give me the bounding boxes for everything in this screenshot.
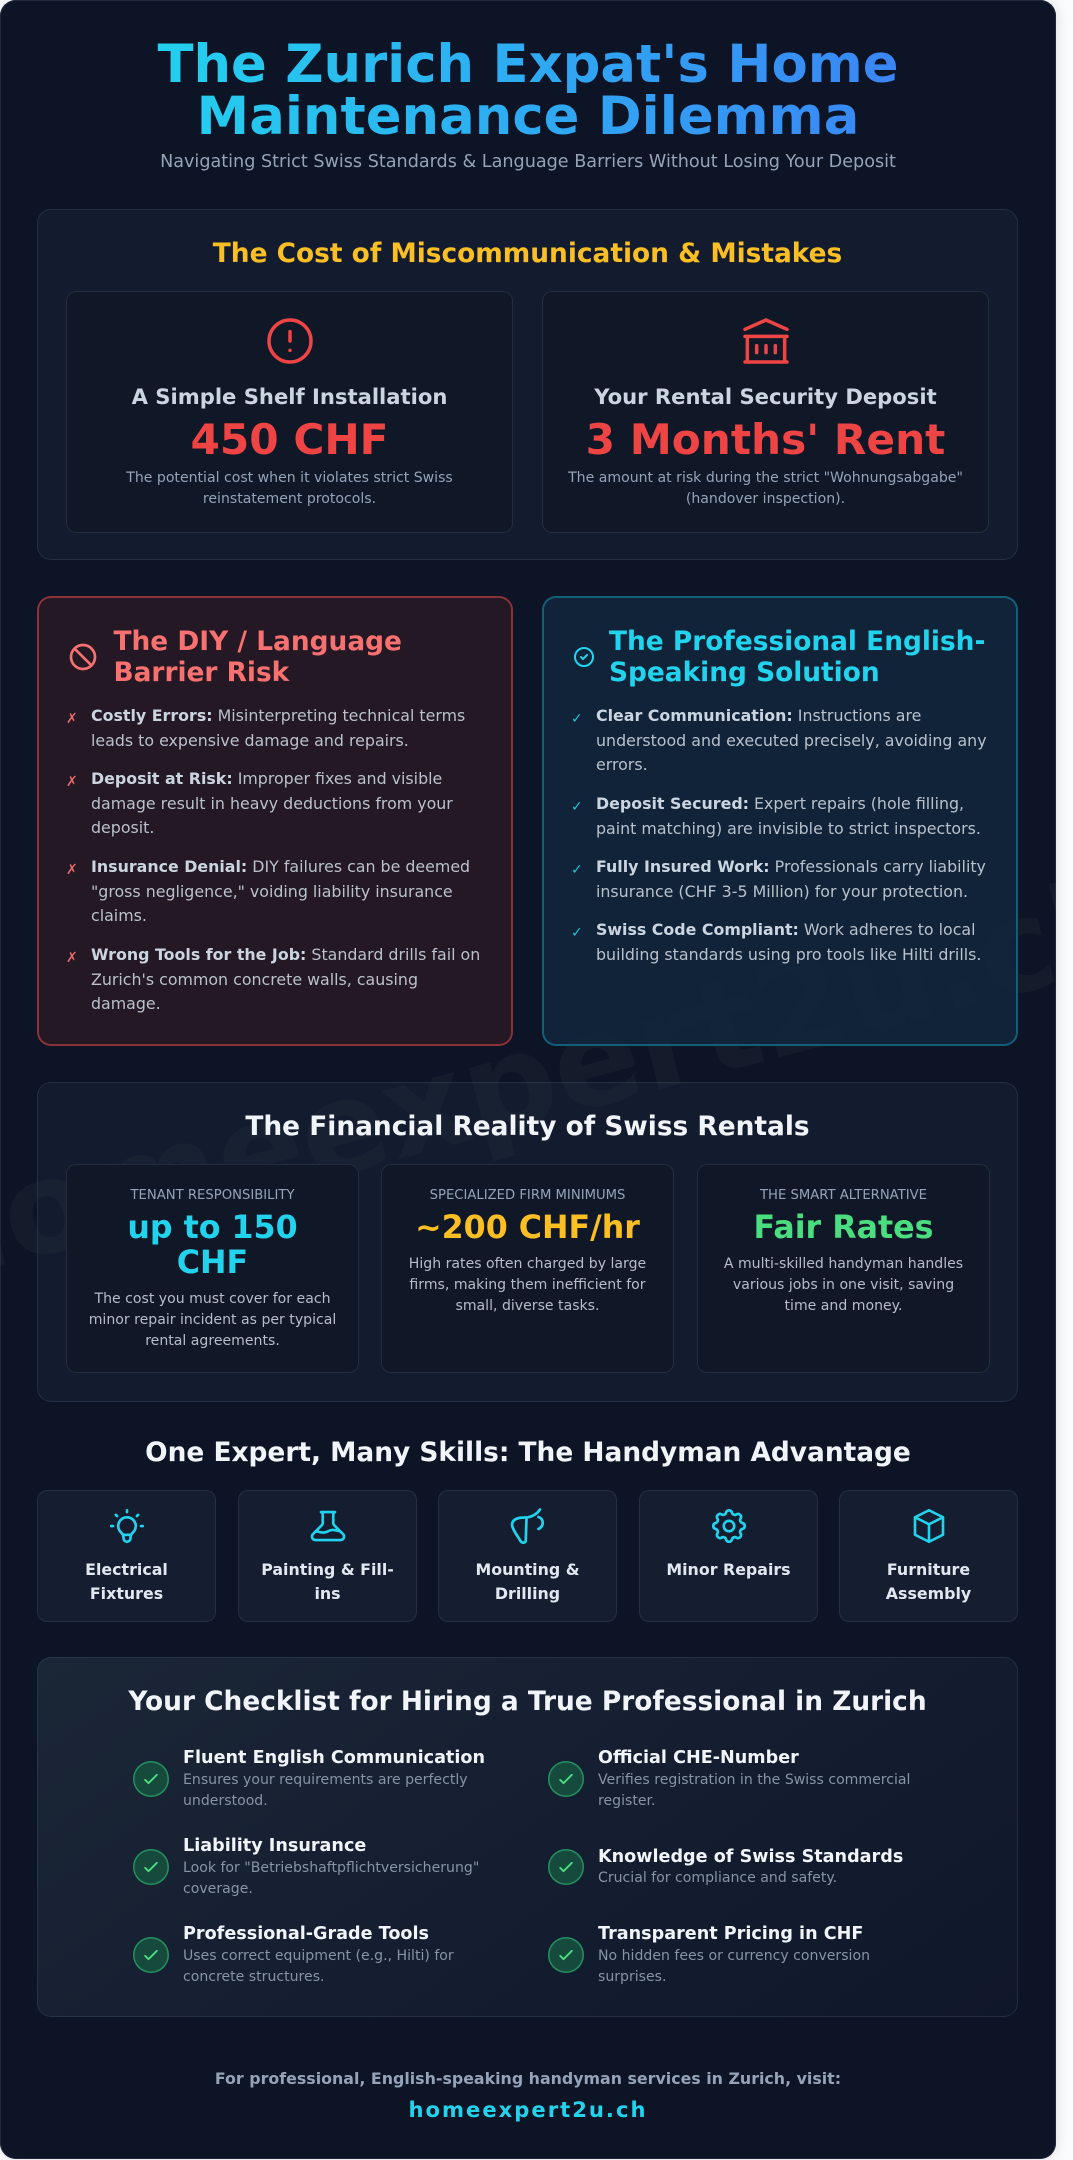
item marker: ✗ — [66, 711, 78, 727]
subtitle: Navigating Strict Swiss Standards & Language Barriers Without Losing Your Deposit — [160, 152, 896, 172]
check badge — [548, 1761, 584, 1797]
item: swiss code — [596, 920, 981, 964]
icon: drill — [510, 1508, 544, 1544]
list: professional benefits — [571, 706, 987, 964]
icon: bank — [743, 318, 789, 364]
card: specialized firm minimums — [381, 1164, 674, 1373]
item: clear communication — [596, 706, 987, 774]
item marker: ✗ — [66, 774, 78, 790]
item description: register. — [598, 1793, 655, 1809]
value: Fair Rates — [754, 1210, 933, 1246]
value: up to 150 — [127, 1210, 298, 1246]
label: TENANT RESPONSIBILITY — [130, 1188, 294, 1203]
check badge — [548, 1937, 584, 1973]
heading: professional — [609, 626, 985, 688]
check item: fluent english — [133, 1748, 485, 1809]
item description — [598, 1772, 910, 1809]
description: High rates often charged by large — [409, 1256, 646, 1272]
tile: painting — [238, 1490, 417, 1622]
item title: Official CHE-Number — [598, 1748, 799, 1768]
label: SPECIALIZED FIRM MINIMUMS — [430, 1188, 625, 1203]
tile label — [475, 1560, 580, 1603]
item: costly errors — [91, 706, 465, 750]
icon: ban — [70, 644, 96, 670]
check item: transparent pricing — [548, 1923, 988, 1989]
tile: minor repairs — [639, 1490, 818, 1622]
item marker: ✓ — [571, 925, 583, 941]
item: wrong tools: Wrong Tools for the Job: Standard drills fail on — [91, 945, 480, 964]
item description: surprises. — [598, 1969, 666, 1985]
check badge — [133, 1761, 169, 1797]
item description: Ensures your requirements are perfectly — [183, 1772, 468, 1788]
tile label: Furniture — [887, 1560, 970, 1578]
icon: check circle — [574, 647, 594, 667]
item: wrong tools: Zurich's common concrete walls, causing — [91, 970, 418, 989]
label: THE SMART ALTERNATIVE — [760, 1188, 927, 1203]
description: reinstatement protocols. — [203, 491, 376, 507]
icon: light bulb — [110, 1509, 144, 1544]
card: shelf installation — [66, 291, 513, 533]
item: insurance denial — [91, 857, 470, 925]
card: security deposit — [542, 291, 989, 533]
icon: cube — [914, 1508, 944, 1544]
description: various jobs in one visit, saving — [733, 1277, 954, 1293]
item: costly errors: leads to expensive damage and repairs. — [91, 731, 409, 750]
check item: CHE number — [548, 1748, 910, 1809]
description: (handover inspection). — [686, 491, 845, 507]
big number: 450 CHF — [190, 415, 389, 464]
card title: Your Rental Security Deposit — [594, 384, 937, 409]
panel: checklist — [37, 1657, 1018, 2017]
value: ~200 CHF/hr — [415, 1210, 640, 1246]
tile label: ins — [314, 1584, 341, 1603]
item marker: ✗ — [66, 950, 78, 966]
description: firms, making them inefficient for — [409, 1277, 646, 1293]
item: swiss code: Swiss Code Compliant: Work adheres to local — [596, 920, 976, 939]
description — [126, 470, 453, 507]
item description: No hidden fees or currency conversion — [598, 1948, 870, 1964]
item: clear communication: understood and executed precisely, avoiding any — [596, 731, 987, 750]
description: The cost you must cover for each — [94, 1290, 331, 1306]
check item: swiss standards — [548, 1847, 903, 1886]
panel: DIY risk — [37, 596, 513, 1046]
tile label: Mounting & — [475, 1560, 580, 1578]
check item: professional tools — [133, 1924, 454, 1985]
item description — [183, 1860, 479, 1897]
item marker: ✓ — [571, 862, 583, 878]
panel: cost of miscommunication — [37, 209, 1018, 560]
footer link: homeexpert2u.ch — [408, 2097, 647, 2122]
item: deposit secured: paint matching) are invisible to strict inspectors. — [596, 819, 981, 838]
heading: DIY: Barrier Risk — [114, 657, 289, 688]
item: deposit at risk — [91, 769, 453, 837]
item description — [183, 1772, 468, 1809]
description — [724, 1256, 963, 1314]
item marker: ✓ — [571, 799, 583, 815]
item description: Look for "Betriebshaftpflichtversicherung" — [183, 1860, 479, 1876]
item: swiss code: building standards using pro tools like Hilti drills. — [596, 945, 981, 964]
item: insurance denial: claims. — [91, 906, 147, 925]
item title: Fluent English Communication — [183, 1748, 485, 1768]
item: costly errors: Costly Errors: Misinterpreting technical terms — [91, 706, 465, 725]
description — [568, 470, 963, 507]
item description: Crucial for compliance and safety. — [598, 1870, 837, 1886]
check item: liability insurance — [133, 1836, 479, 1897]
heading: handyman advantage: One Expert, Many Skills: The Handyman Advantage — [145, 1437, 911, 1468]
item marker: ✗ — [66, 862, 78, 878]
tile: furniture assembly — [839, 1490, 1018, 1622]
panel: professional solution — [542, 596, 1018, 1046]
item: clear communication: errors. — [596, 755, 648, 774]
item: deposit at risk: deposit. — [91, 818, 154, 837]
item: fully insured — [596, 857, 986, 901]
tile label — [261, 1560, 394, 1603]
item title: Knowledge of Swiss Standards — [598, 1847, 903, 1867]
item marker: ✓ — [571, 711, 583, 727]
footer text: For professional, English-speaking handyman services in Zurich, visit: — [215, 2068, 841, 2088]
heading: cost: The Cost of Miscommunication & Mistakes — [213, 238, 842, 269]
check badge — [133, 1937, 169, 1973]
description: The potential cost when it violates strict Swiss — [126, 470, 453, 486]
title: The Zurich Expat's Home — [157, 34, 899, 94]
item description — [183, 1946, 454, 1988]
item description — [598, 1946, 870, 1988]
heading: DIY — [114, 626, 402, 688]
description — [89, 1290, 336, 1349]
description: The amount at risk during the strict "Wohnungsabgabe" — [568, 470, 963, 486]
description — [409, 1256, 646, 1314]
tile label: Assembly — [886, 1584, 971, 1603]
item description: coverage. — [183, 1881, 253, 1897]
card: tenant responsibility — [66, 1164, 359, 1373]
tile label: Fixtures — [90, 1584, 163, 1603]
item: deposit at risk: Deposit at Risk: Improper fixes and visible — [91, 769, 442, 788]
check badge — [133, 1849, 169, 1885]
tile label: Drilling — [495, 1584, 560, 1603]
item: insurance denial: "gross negligence," voiding liability insurance — [91, 882, 453, 901]
item: insurance denial: Insurance Denial: DIY failures can be deemed — [91, 857, 470, 876]
description: A multi-skilled handyman handles — [724, 1256, 963, 1272]
item description: Uses correct equipment (e.g., Hilti) for — [183, 1948, 454, 1964]
heading: professional: Speaking Solution — [609, 657, 880, 688]
card: smart alternative — [697, 1164, 990, 1373]
tile label: Minor Repairs — [666, 1560, 791, 1578]
title — [128, 38, 928, 144]
description: time and money. — [785, 1298, 902, 1314]
description: small, diverse tasks. — [456, 1298, 600, 1314]
icon: flask — [310, 1510, 346, 1542]
tile label — [886, 1560, 971, 1603]
description: minor repair incident as per typical — [89, 1312, 336, 1328]
item: deposit at risk: damage result in heavy deductions from your — [91, 794, 453, 813]
card title: A Simple Shelf Installation — [132, 384, 447, 409]
title: Maintenance Dilemma — [197, 86, 859, 147]
item title: Professional-Grade Tools — [183, 1924, 429, 1944]
tile label — [85, 1560, 168, 1603]
item: clear communication: Clear Communication: Instructions are — [596, 706, 921, 725]
list: DIY risks — [66, 706, 480, 1013]
item: fully insured: Fully Insured Work: Professionals carry liability — [596, 857, 986, 876]
item: deposit secured — [596, 794, 981, 838]
panel: financial reality — [37, 1082, 1018, 1402]
heading: professional: The Professional English- — [609, 626, 985, 657]
item: wrong tools: damage. — [91, 994, 161, 1013]
item description: understood. — [183, 1793, 268, 1809]
tile label: Electrical — [85, 1560, 168, 1578]
item: wrong tools — [91, 945, 480, 1013]
item: fully insured: insurance (CHF 3-5 Million) for your protection. — [596, 882, 968, 901]
check badge — [548, 1849, 584, 1885]
heading: checklist: Your Checklist for Hiring a True Professional in Zurich — [128, 1686, 927, 1717]
tile: electrical fixtures — [37, 1490, 216, 1622]
item title: Transparent Pricing in CHF — [598, 1924, 863, 1944]
value — [127, 1210, 298, 1281]
heading: DIY: The DIY / Language — [114, 626, 402, 657]
big number: 3 Months' Rent — [586, 415, 945, 464]
item: deposit secured: Deposit Secured: Expert repairs (hole filling, — [596, 794, 964, 813]
tile: mounting — [438, 1490, 617, 1622]
item title: Liability Insurance — [183, 1836, 366, 1856]
description: rental agreements. — [145, 1333, 280, 1349]
tile label: Painting & Fill- — [261, 1560, 394, 1578]
item description: Verifies registration in the Swiss commercial — [598, 1772, 910, 1788]
value: CHF — [177, 1245, 248, 1281]
heading: financial: The Financial Reality of Swiss Rentals — [245, 1110, 810, 1142]
item description: concrete structures. — [183, 1969, 325, 1985]
icon: cog — [712, 1509, 746, 1544]
icon: exclamation circle — [267, 318, 313, 364]
